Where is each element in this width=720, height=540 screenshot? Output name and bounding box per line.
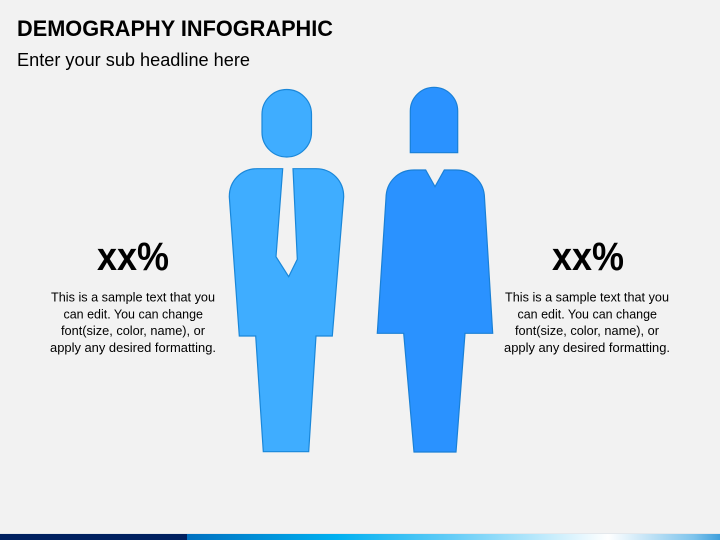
right text block (504, 235, 670, 355)
footer bar (0, 533, 720, 540)
woman body with dress (377, 170, 493, 452)
left description: apply any desired formatting. (50, 340, 216, 355)
icon: man (229, 90, 344, 452)
man head (262, 90, 312, 157)
title: DEMOGRAPHY INFOGRAPHIC (17, 16, 333, 41)
right description: This is a sample text that you (505, 290, 669, 304)
left description: can edit. You can change (64, 306, 203, 322)
right description: apply any desired formatting. (504, 340, 670, 355)
left text block (50, 235, 216, 355)
right description: font(size, color, name), or (515, 323, 660, 338)
woman head (410, 87, 458, 153)
right description: can edit. You can change (518, 306, 657, 322)
left percentage: xx% (97, 235, 169, 279)
man body with tie cutout (229, 169, 344, 452)
left description (50, 290, 216, 355)
left description: font(size, color, name), or (61, 323, 206, 338)
right description (504, 290, 670, 355)
icon: woman (377, 87, 493, 452)
right percentage: xx% (552, 235, 624, 279)
sub headline: Enter your sub headline here (17, 50, 250, 70)
left description: This is a sample text that you (51, 290, 215, 304)
